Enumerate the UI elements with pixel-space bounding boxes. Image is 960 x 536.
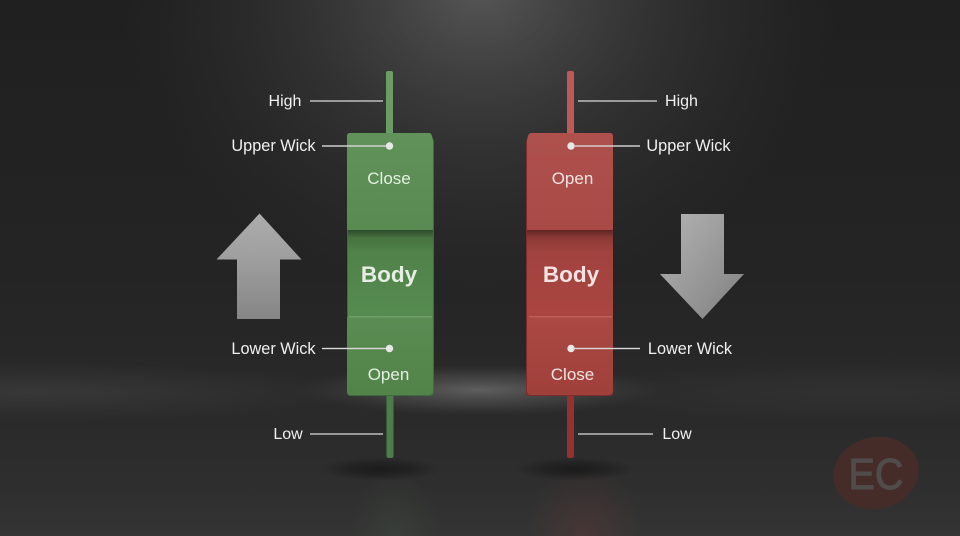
middle block: green	[348, 230, 433, 317]
label: Low (green): Low	[273, 426, 303, 443]
text: Close (red): Close	[551, 365, 594, 384]
label: High (green)	[269, 93, 383, 110]
shadow: green candle	[320, 457, 440, 481]
label: High (red)	[578, 93, 698, 110]
arrow: up	[216, 214, 302, 319]
lower wick: red	[567, 396, 574, 458]
upper block: red	[527, 133, 613, 231]
label: Upper Wick (green)	[231, 137, 393, 155]
label: Lower Wick (green)	[231, 340, 393, 358]
candle body block: red	[526, 133, 613, 396]
upper wick: green	[386, 71, 393, 135]
upper block: green	[347, 133, 433, 231]
label: High (green): High	[269, 93, 301, 110]
arrow: down	[660, 214, 744, 319]
lower wick: green	[386, 396, 394, 458]
logo: EC watermark	[826, 429, 926, 517]
upper wick: red	[567, 71, 574, 135]
label: Low (red): Low	[662, 426, 692, 443]
text: Body (red): Body	[543, 262, 600, 287]
label: Lower Wick (green): Lower Wick	[231, 340, 316, 358]
logo: EC watermark: EC	[848, 450, 904, 499]
label: Upper Wick (green): Upper Wick	[231, 137, 316, 155]
label: Low (red)	[578, 426, 692, 443]
text: Close (green): Close	[367, 169, 411, 188]
text: Body (green): Body	[361, 262, 418, 287]
lower block: red	[527, 316, 613, 395]
label: Upper Wick (red): Upper Wick	[646, 137, 731, 155]
red candlestick	[526, 71, 613, 458]
label: High (red): High	[665, 93, 698, 110]
label: Lower Wick (red)	[567, 340, 733, 358]
lower block: green	[347, 316, 433, 395]
shadow: red candle	[515, 457, 635, 481]
candle body block: green	[347, 133, 434, 396]
green candlestick	[347, 71, 434, 458]
label: Low (green)	[273, 426, 383, 443]
text: Open (green): Open	[368, 365, 409, 384]
text: Open (red): Open	[552, 169, 593, 188]
label: Upper Wick (red)	[567, 137, 731, 155]
middle block: red	[527, 230, 613, 317]
label: Lower Wick (red): Lower Wick	[648, 340, 733, 358]
